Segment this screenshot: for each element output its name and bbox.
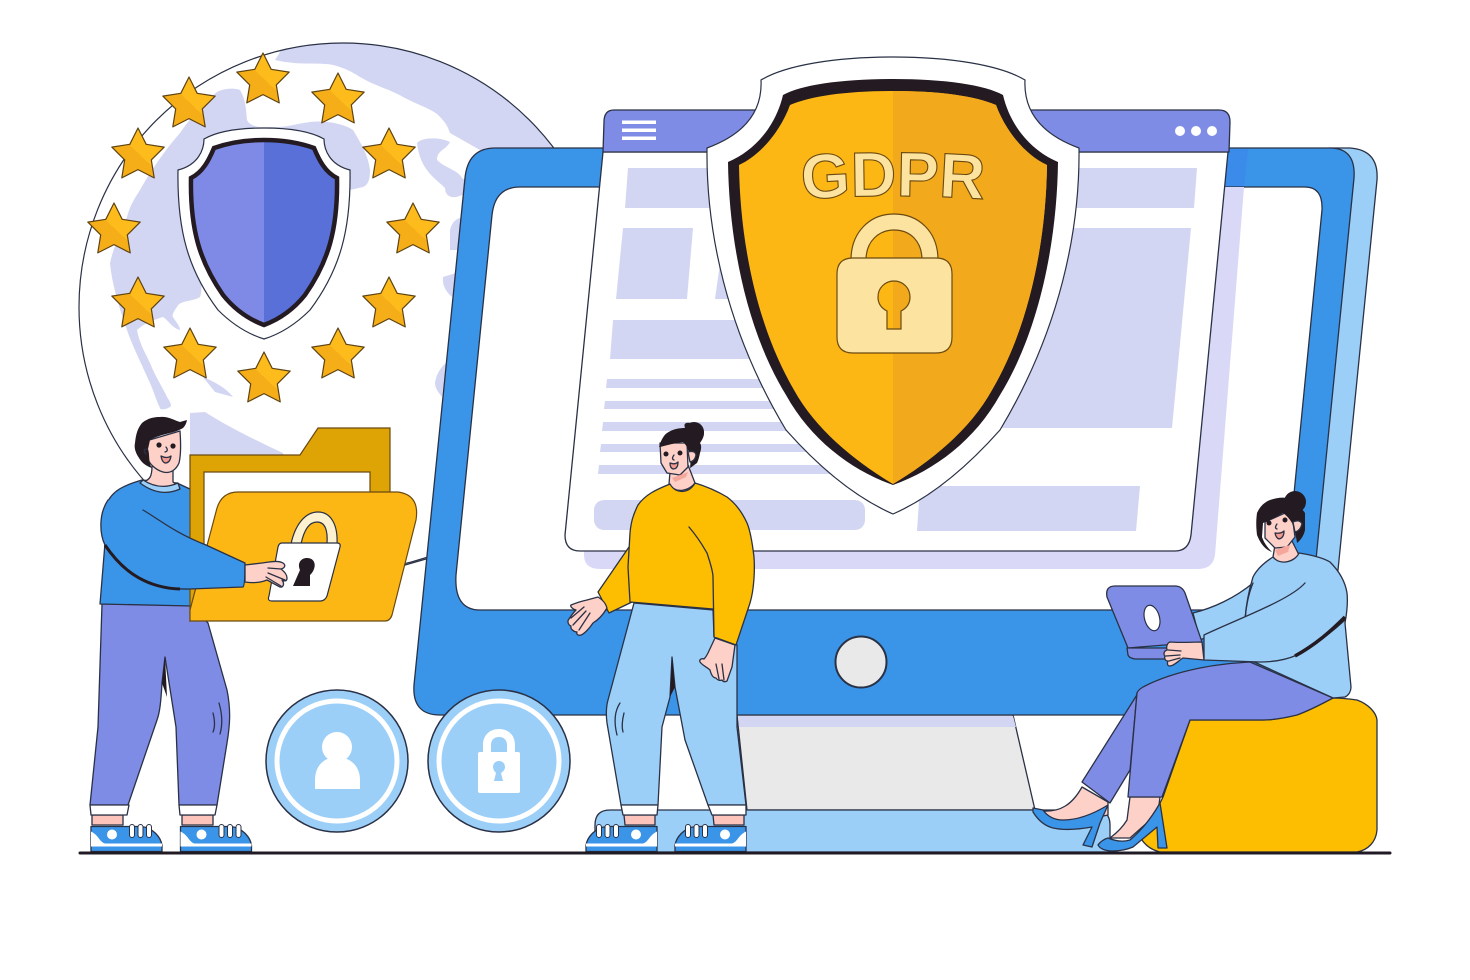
stand shadow [738, 716, 1016, 727]
neck shadow [672, 472, 688, 482]
rear foot [1043, 787, 1108, 825]
screen [456, 187, 1322, 610]
person: man with folder [90, 417, 417, 852]
laptop logo [1141, 604, 1163, 632]
hand [1164, 642, 1204, 666]
stand [737, 715, 1035, 810]
rear shoe [1033, 805, 1108, 847]
sweater [628, 483, 754, 645]
front leg and thigh [1128, 662, 1333, 797]
GDPR text arc guide [780, 196, 1006, 201]
hand [245, 561, 287, 587]
folder connector line [405, 559, 426, 565]
ground line [80, 852, 1390, 854]
trousers [606, 603, 746, 805]
person: seated woman [1033, 491, 1351, 851]
neck [1273, 541, 1299, 562]
browser window [565, 110, 1244, 569]
bag strap [1295, 617, 1345, 656]
badge: lock [428, 690, 570, 832]
arm [101, 500, 245, 589]
monitor frame [414, 148, 1354, 715]
left cuff and sock [92, 815, 123, 825]
power button [836, 636, 886, 688]
hair [1256, 498, 1305, 552]
face [660, 443, 688, 475]
left shoe [586, 824, 657, 852]
rear arm [1193, 583, 1253, 640]
monitor back edge [1290, 148, 1377, 700]
right shoe [675, 824, 746, 852]
folder back [190, 428, 390, 621]
left cuff and sock [624, 815, 655, 825]
right shoe [180, 824, 252, 852]
shield dark border [728, 79, 1058, 485]
badge: user [266, 690, 408, 832]
right hand [700, 638, 735, 682]
face [1265, 513, 1295, 548]
laptop base [1127, 648, 1178, 659]
stars ring [88, 53, 439, 402]
collar [140, 480, 180, 492]
trouser crease [670, 657, 675, 697]
window shadow [584, 187, 1244, 569]
knee wrinkles [213, 703, 222, 734]
window header [603, 110, 1230, 152]
face [146, 431, 181, 473]
right cuff and sock [182, 815, 213, 825]
shield left half [739, 91, 1047, 484]
left sleeve [598, 547, 632, 613]
trouser crease [162, 657, 167, 697]
person: centre woman [568, 422, 754, 852]
monitor [414, 148, 1377, 852]
frame shade patch [1222, 149, 1248, 187]
window dots [1175, 126, 1217, 136]
face details [664, 450, 696, 469]
laptop lid [1107, 586, 1202, 648]
illustration: GDPR data protection scene [78, 42, 1392, 854]
hair [659, 423, 704, 468]
neck [669, 465, 695, 490]
bun [684, 422, 704, 442]
small blue shield [178, 128, 350, 339]
rear leg [1082, 690, 1140, 803]
knee wrinkles [615, 703, 624, 735]
left hand [568, 597, 607, 635]
front foot [1110, 797, 1160, 838]
stand base [595, 810, 1110, 852]
folder paper [204, 472, 370, 570]
right cuff and sock [713, 815, 744, 825]
face details [1266, 518, 1302, 539]
bun [1284, 491, 1306, 513]
body fold [1245, 583, 1253, 620]
front shoe [1098, 803, 1167, 851]
bag strap [105, 545, 180, 589]
face details [144, 442, 176, 463]
padlock [837, 214, 952, 353]
hair [135, 417, 187, 468]
folder padlock [268, 512, 340, 601]
sleeve line [689, 527, 714, 637]
globe [78, 42, 554, 564]
large GDPR shield [706, 56, 1080, 515]
torso [100, 480, 192, 606]
folder front [190, 492, 417, 621]
content placeholders [594, 168, 1197, 531]
shield right half [893, 91, 1047, 484]
shield white border [707, 57, 1079, 514]
neck shadow [1275, 545, 1290, 556]
trousers [90, 604, 230, 805]
left shoe [91, 824, 162, 852]
window body [565, 152, 1228, 551]
neck [143, 466, 177, 489]
beanbag seat [1142, 698, 1377, 852]
hamburger menu [622, 120, 656, 140]
GDPR label: GDPR [802, 152, 984, 200]
front arm [1204, 583, 1345, 662]
torso [1245, 553, 1351, 698]
